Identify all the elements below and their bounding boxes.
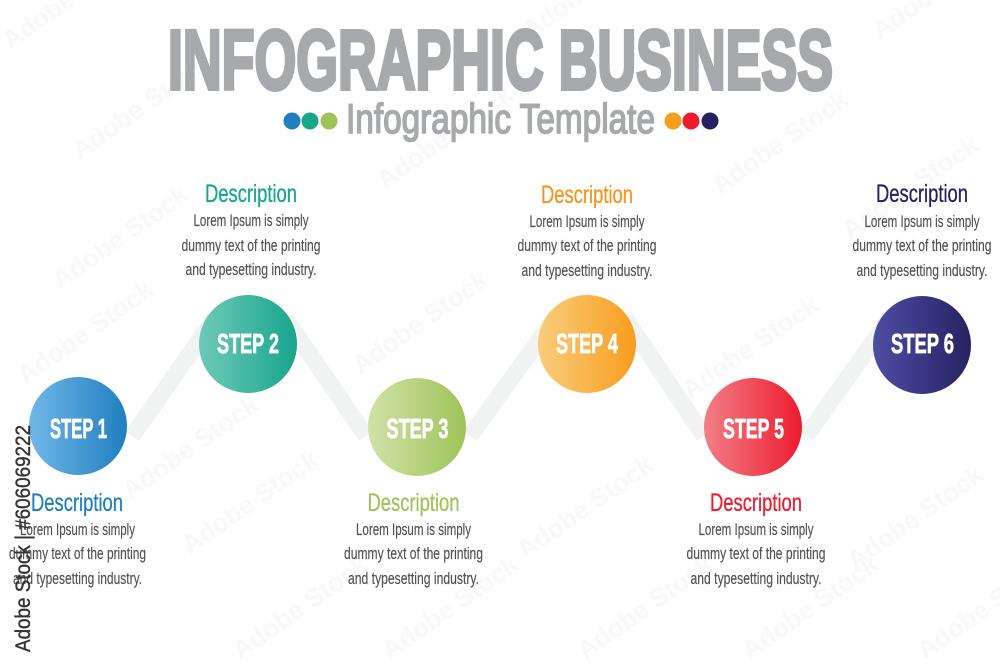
watermark pattern: Adobe Stock	[371, 79, 519, 195]
step 3 label: STEP 3	[386, 413, 448, 444]
watermark pattern: Adobe Stock	[736, 549, 884, 665]
watermark pattern: Adobe Stock	[46, 179, 194, 295]
step 1 body: and typesetting industry.	[13, 570, 142, 588]
watermark pattern: Adobe Stock	[706, 84, 854, 200]
step 6 circle	[873, 296, 971, 394]
step 6	[852, 180, 992, 394]
step 5 label: STEP 5	[723, 413, 784, 444]
watermark pattern: Adobe Stock	[676, 289, 824, 405]
step 5 circle	[704, 378, 802, 476]
step 5 body	[686, 521, 826, 588]
step 3 body	[344, 521, 483, 588]
watermark pattern: Adobe Stock	[11, 274, 159, 390]
step 5 body: and typesetting industry.	[690, 570, 822, 588]
step 1 heading: Description	[31, 489, 123, 517]
step 2 body: dummy text of the printing	[182, 237, 320, 255]
step 2 body: and typesetting industry.	[186, 261, 316, 279]
step 5	[686, 378, 826, 588]
step 4	[518, 181, 656, 393]
step 2 heading: Description	[205, 180, 297, 208]
watermark pattern: Adobe Stock	[836, 129, 984, 245]
step 2 body	[182, 212, 320, 279]
step 1 circle	[29, 377, 127, 475]
step 4 body: dummy text of the printing	[518, 237, 656, 255]
zigzag connector	[132, 318, 890, 436]
step 1 body: dummy text of the printing	[9, 545, 146, 563]
watermark pattern: Adobe Stock	[571, 549, 719, 665]
watermark pattern: Adobe Stock	[346, 264, 494, 380]
decorative dots: left	[284, 112, 338, 130]
watermark pattern: Adobe Stock	[116, 389, 264, 505]
step 2 label: STEP 2	[217, 328, 279, 359]
step 3 circle	[368, 378, 466, 476]
step 5 body: dummy text of the printing	[686, 545, 826, 563]
subtitle: Infographic Template	[346, 95, 655, 142]
step 1 label: STEP 1	[50, 413, 107, 444]
step 5 heading: Description	[710, 489, 802, 517]
step 5 body: Lorem Ipsum is simply	[698, 521, 814, 539]
step 2 body: Lorem Ipsum is simply	[194, 212, 309, 230]
step 1	[9, 377, 146, 588]
watermark pattern: Adobe Stock	[226, 549, 374, 665]
decorative dots: right	[664, 112, 718, 130]
watermark pattern: Adobe Stock	[841, 459, 989, 575]
step 4 body	[518, 213, 656, 280]
step 3 body: dummy text of the printing	[344, 545, 483, 563]
step 4 circle	[538, 295, 636, 393]
step 2 circle	[199, 295, 297, 393]
step 1 body: Lorem Ipsum is simply	[20, 521, 136, 539]
step 4 heading: Description	[541, 181, 633, 209]
watermark pattern: Adobe Stock	[376, 549, 524, 665]
step 6 label: STEP 6	[891, 328, 954, 359]
step 3 body: and typesetting industry.	[348, 570, 479, 588]
step 3 body: Lorem Ipsum is simply	[356, 521, 472, 539]
step 4 body: and typesetting industry.	[522, 262, 652, 280]
step 6 body	[852, 213, 992, 280]
watermark pattern: Adobe Stock	[66, 49, 214, 165]
stock id label: Adobe Stock | #606069222	[12, 425, 35, 652]
step 2	[182, 180, 320, 393]
step 3	[344, 378, 483, 588]
step 3 heading: Description	[368, 489, 460, 517]
step 6 heading: Description	[876, 180, 968, 208]
watermark pattern: Adobe Stock	[511, 449, 659, 565]
watermark pattern: Adobe Stock	[176, 444, 324, 560]
step 4 label: STEP 4	[556, 328, 618, 359]
step 1 body	[9, 521, 146, 588]
step 4 body: Lorem Ipsum is simply	[530, 213, 645, 231]
